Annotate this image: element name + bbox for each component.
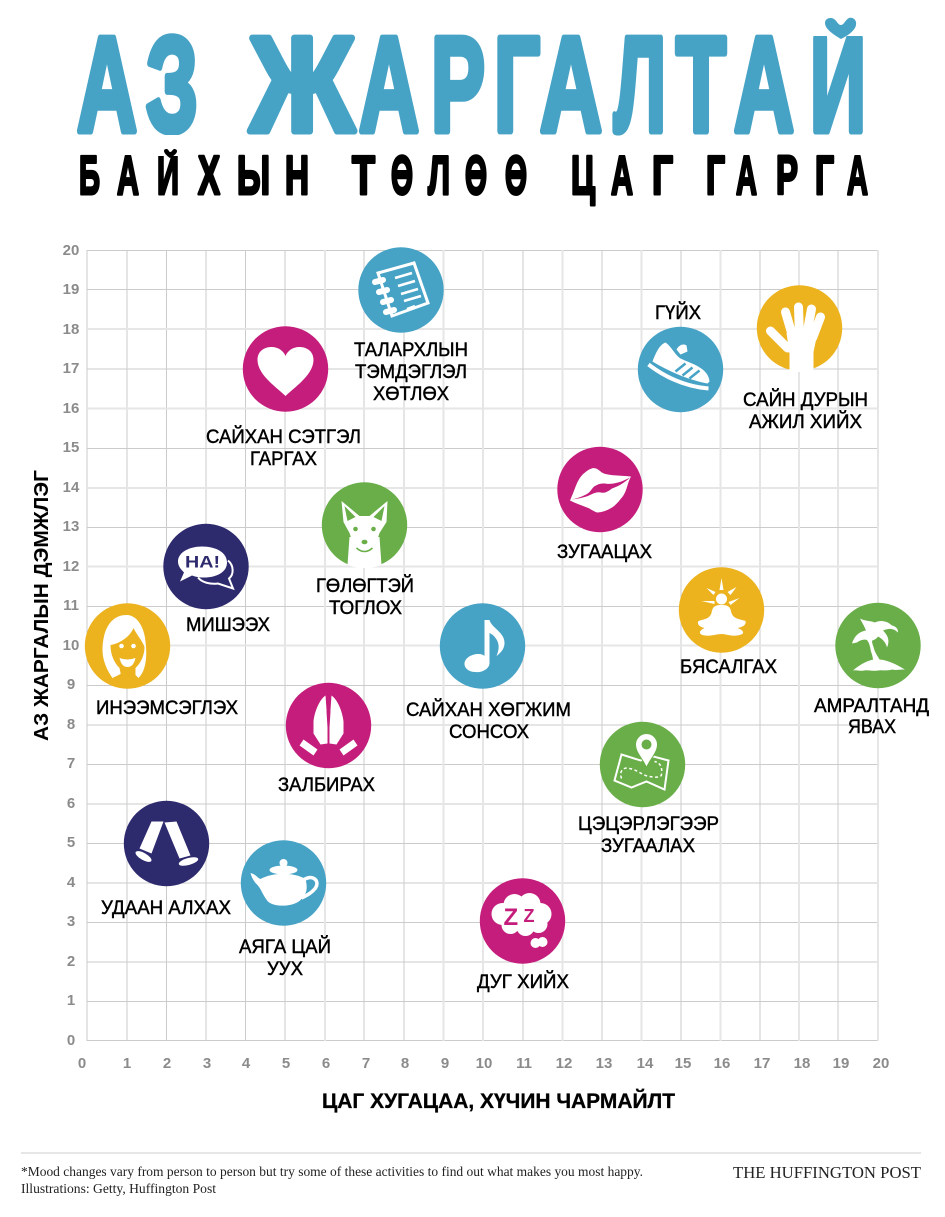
x axis tick labels: 8 <box>401 1055 409 1072</box>
subtitle: А <box>611 144 633 206</box>
label: slow walking: УДААН АЛХАХ <box>101 898 231 919</box>
title: А <box>77 9 137 160</box>
label: puppy: ГӨЛӨГТЭЙ <box>316 575 414 597</box>
subtitle: Ц <box>571 144 595 206</box>
x axis tick labels: 3 <box>203 1055 211 1072</box>
label: listening to music <box>406 699 571 743</box>
subtitle: Й <box>157 143 179 206</box>
icon: sleep cloud: Z <box>504 904 518 931</box>
subtitle: Ө <box>465 144 487 206</box>
icon: helping hand <box>757 285 842 372</box>
title: Ж <box>249 9 355 160</box>
label: volunteering: АЖИЛ ХИЙХ <box>749 411 862 433</box>
x axis tick labels: 15 <box>675 1055 691 1072</box>
title: Й <box>810 8 866 160</box>
title: А <box>540 9 602 160</box>
x axis tick labels: 9 <box>441 1055 449 1072</box>
label: kindness: ГАРГАХ <box>250 449 317 470</box>
grid <box>87 250 878 1041</box>
subtitle: А <box>117 144 139 206</box>
x axis tick labels: 10 <box>476 1055 492 1072</box>
label: puppy: ТОГЛОХ <box>329 598 402 619</box>
icon: dog <box>322 482 407 568</box>
title <box>77 0 872 160</box>
y axis tick labels: 4 <box>67 874 76 891</box>
x axis tick labels: 19 <box>833 1055 849 1072</box>
y axis tick labels: 14 <box>63 479 80 496</box>
x axis tick labels: 0 <box>78 1055 86 1072</box>
x axis tick labels: 12 <box>556 1055 572 1072</box>
subtitle: Г <box>706 144 725 206</box>
x axis tick labels: 18 <box>794 1055 810 1072</box>
label: listening to music: САЙХАН ХӨГЖИМ <box>406 699 571 721</box>
subtitle: Н <box>285 144 309 206</box>
subtitle: Ы <box>237 144 270 206</box>
x axis tick labels: 1 <box>123 1055 131 1072</box>
title: Р <box>431 9 485 160</box>
y axis tick labels: 8 <box>67 716 75 733</box>
icon: music note <box>440 603 525 689</box>
icon: speech bubbles: НА! <box>185 552 220 572</box>
y axis tick labels: 9 <box>67 676 75 693</box>
x axis tick labels <box>78 1055 889 1072</box>
label: drinking tea: АЯГА ЦАЙ <box>239 936 331 958</box>
x axis tick labels: 4 <box>242 1055 251 1072</box>
icon: palm island <box>835 603 921 688</box>
label: vacation: ЯВАХ <box>848 717 896 738</box>
icon: heart <box>243 326 328 412</box>
title: З <box>146 9 198 160</box>
label: volunteering: САЙН ДУРЫН <box>743 389 868 411</box>
y axis tick labels: 2 <box>67 953 75 970</box>
label: vacation: АМРАЛТАНД <box>814 696 929 717</box>
label: vacation <box>814 696 929 738</box>
label: drinking tea: УУХ <box>267 959 303 980</box>
subtitle: Г <box>815 144 834 206</box>
subtitle <box>79 135 868 206</box>
label: listening to music: СОНСОХ <box>449 722 529 743</box>
icon: gratitude journal <box>358 247 444 333</box>
footnote: Illustrations: Getty, Huffington Post <box>21 1181 216 1196</box>
subtitle: Р <box>776 144 798 206</box>
y axis tick labels: 12 <box>63 558 79 575</box>
label: making out: ЗУГААЦАХ <box>557 542 652 563</box>
x axis title: ЦАГ ХУГАЦАА, ХҮЧИН ЧАРМАЙЛТ <box>322 1089 675 1113</box>
label: volunteering <box>743 389 868 433</box>
title: Л <box>614 9 666 160</box>
brand: THE HUFFINGTON POST <box>733 1163 922 1182</box>
subtitle: А <box>736 144 757 206</box>
title: Т <box>676 9 726 160</box>
icon: meditation <box>679 567 764 653</box>
icon: woman smiling <box>85 603 170 689</box>
label: garden walk: ЗУГААЛАХ <box>601 836 695 857</box>
label: journal: ТЭМДЭГЛЭЛ <box>355 362 467 383</box>
y axis tick labels: 15 <box>63 439 79 456</box>
title: А <box>359 9 419 160</box>
x axis tick labels: 6 <box>322 1055 330 1072</box>
footnote <box>21 1164 643 1196</box>
label: meditating: БЯСАЛГАХ <box>680 657 777 678</box>
x axis tick labels: 5 <box>282 1055 290 1072</box>
y axis tick labels: 17 <box>63 360 79 377</box>
label: kindness <box>206 426 361 470</box>
y axis title: АЗ ЖАРГАЛЫН ДЭМЖЛЭГ <box>31 470 53 741</box>
icon: walking legs <box>124 801 209 886</box>
subtitle: Ө <box>505 144 527 206</box>
subtitle: Б <box>79 144 100 206</box>
y axis tick labels: 10 <box>63 637 79 654</box>
icon: teapot <box>241 840 326 926</box>
y axis tick labels: 13 <box>63 518 79 535</box>
subtitle: Ө <box>391 144 413 206</box>
title: Г <box>494 9 540 160</box>
x axis tick labels: 7 <box>362 1055 370 1072</box>
y axis tick labels: 18 <box>63 321 79 338</box>
label: journal: ХӨТЛӨХ <box>373 384 449 405</box>
icon: sleep cloud <box>480 878 565 964</box>
label: running: ГҮЙХ <box>655 302 701 324</box>
subtitle: А <box>847 144 868 206</box>
y axis tick labels: 0 <box>67 1032 75 1049</box>
y axis tick labels <box>63 242 80 1049</box>
label: garden walk <box>578 814 719 857</box>
y axis tick labels: 11 <box>63 597 79 614</box>
subtitle: Л <box>428 144 450 206</box>
label: praying: ЗАЛБИРАХ <box>278 775 375 796</box>
subtitle: Г <box>652 144 673 206</box>
y axis tick labels: 1 <box>67 992 75 1009</box>
x axis tick labels: 16 <box>714 1055 730 1072</box>
title: А <box>734 9 794 160</box>
subtitle: Х <box>198 144 220 206</box>
y axis tick labels: 6 <box>67 795 75 812</box>
label: laughing: МИШЭЭХ <box>186 615 270 636</box>
y axis tick labels: 5 <box>67 834 75 851</box>
label: garden walk: ЦЭЦЭРЛЭГЭЭР <box>578 814 719 835</box>
label: journal: ТАЛАРХЛЫН <box>354 340 468 361</box>
y axis tick labels: 16 <box>63 400 79 417</box>
label: smiling: ИНЭЭМСЭГЛЭХ <box>96 698 238 719</box>
footer divider <box>21 1152 921 1154</box>
y axis tick labels: 20 <box>63 242 79 259</box>
icon: lips <box>557 447 643 532</box>
icon: running shoe <box>638 327 723 412</box>
x axis tick labels: 13 <box>596 1055 612 1072</box>
icon: praying hands <box>286 683 371 768</box>
icon: speech bubbles <box>163 524 249 609</box>
y axis tick labels: 19 <box>63 281 79 298</box>
subtitle: Т <box>352 144 375 206</box>
y axis tick labels: 3 <box>67 913 75 930</box>
x axis tick labels: 11 <box>516 1055 532 1072</box>
label: journal <box>354 340 468 405</box>
label: puppy <box>316 575 414 619</box>
icon: map with pin <box>600 722 685 807</box>
x axis tick labels: 17 <box>754 1055 770 1072</box>
x axis tick labels: 14 <box>637 1055 654 1072</box>
label: nap: ДУГ ХИЙХ <box>477 971 569 993</box>
footnote: *Mood changes vary from person to person but try some of these activities to find out what makes you most happy. <box>21 1164 643 1179</box>
y axis tick labels: 7 <box>67 755 75 772</box>
x axis tick labels: 2 <box>163 1055 171 1072</box>
icon: sleep cloud: Z <box>524 906 534 926</box>
label: kindness: САЙХАН СЭТГЭЛ <box>206 426 361 448</box>
x axis tick labels: 20 <box>873 1055 889 1072</box>
label: drinking tea <box>239 936 331 980</box>
